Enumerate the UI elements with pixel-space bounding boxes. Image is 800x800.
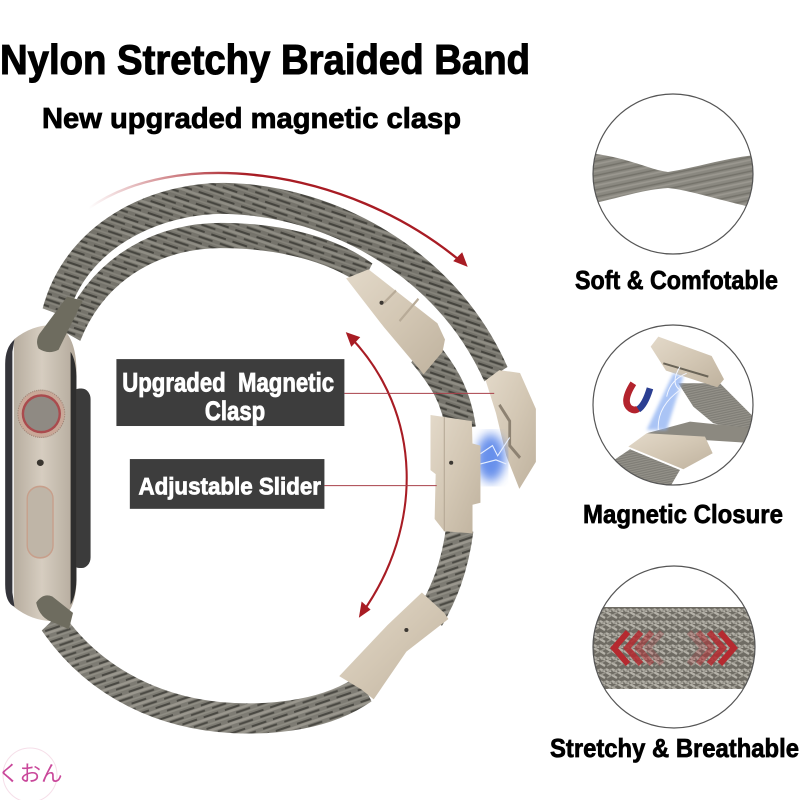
label: upgraded magnetic clasp: Clasp: [205, 396, 265, 426]
label: upgraded magnetic clasp: [116, 359, 344, 426]
caption: Magnetic Closure: [583, 499, 783, 529]
subtitle: New upgraded magnetic clasp: [42, 103, 461, 135]
watch case: [5, 325, 76, 621]
panel: stretchy and breathable: [550, 566, 799, 763]
circle outline: [593, 94, 753, 254]
lower slider clasp: [339, 592, 448, 699]
center clasp: [431, 415, 480, 533]
watch back: [71, 388, 91, 568]
bottom lug: [36, 595, 73, 629]
panel: magnetic closure: [583, 325, 783, 529]
upper strap: [678, 383, 752, 428]
leader line: adjustable slider: [324, 484, 437, 487]
label: adjustable slider: [130, 459, 324, 509]
microphone dot: [37, 459, 44, 466]
title: Nylon Stretchy Braided Band: [0, 36, 530, 83]
bottom band strap: [52, 621, 365, 718]
leader line: magnetic clasp: [344, 392, 494, 395]
outer band strap: [55, 198, 496, 374]
inner band strap: [71, 235, 367, 335]
digital crown: [18, 390, 65, 437]
caption: Soft & Comfotable: [575, 265, 778, 295]
lightning glow: [647, 373, 683, 430]
upper slider clasp: [346, 269, 445, 374]
magnetic lightning glow: [476, 434, 510, 482]
side button: [27, 486, 53, 558]
middle band strap: [422, 350, 461, 429]
label: adjustable slider: Adjustable Slider: [138, 472, 321, 500]
lower strap: [647, 422, 755, 443]
woven band detail: [590, 607, 760, 689]
label: upgraded magnetic clasp: Upgraded Magnetic: [122, 368, 334, 398]
twisted band detail: [590, 153, 756, 208]
top red stretch arrow: [88, 173, 468, 267]
upper clasp: [651, 337, 724, 387]
lower right band strap: [431, 529, 460, 617]
lower left strap: [615, 449, 680, 484]
circle outline: [593, 325, 753, 485]
panel: soft and comfortable: [575, 94, 778, 295]
watermark: [0, 748, 63, 800]
left stretch chevrons: [614, 632, 662, 664]
magnetic closure detail: [612, 337, 755, 490]
horseshoe magnet: [627, 383, 650, 410]
inner red adjustment arrow: [346, 332, 407, 618]
lower clasp: [628, 433, 713, 469]
watch and band illustration: [5, 173, 536, 718]
top lug: [37, 297, 83, 352]
circle outline: [593, 566, 755, 728]
right stretch chevrons: [689, 632, 734, 664]
detached magnetic clasp: [486, 370, 536, 489]
